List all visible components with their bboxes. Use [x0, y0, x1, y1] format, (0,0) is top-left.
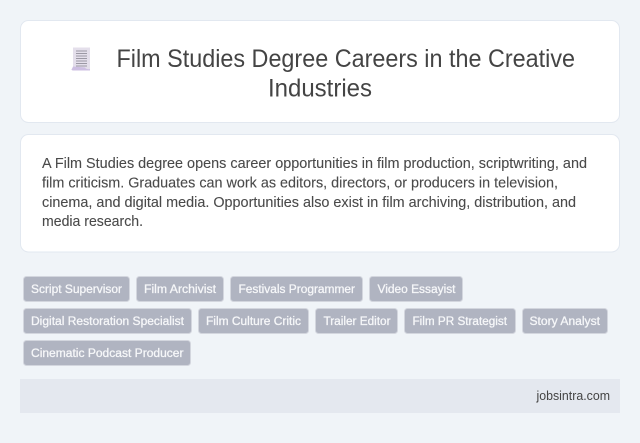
tag: Video Essayist: [370, 276, 462, 302]
tag: Story Analyst: [522, 308, 608, 334]
tag: Digital Restoration Specialist: [24, 308, 192, 334]
title: Industries: [268, 74, 372, 102]
tag: Festivals Programmer: Festivals Programmer: [238, 282, 355, 296]
tag: Cinematic Podcast Producer: Cinematic Podcast Producer: [31, 346, 184, 360]
title: [116, 45, 575, 102]
tag: Trailer Editor: [316, 308, 398, 334]
tag: Festivals Programmer: [230, 276, 362, 302]
tag: Film PR Strategist: Film PR Strategist: [412, 314, 508, 328]
footer bar: jobsintra.com: [536, 389, 610, 403]
tag: Script Supervisor: [24, 276, 130, 302]
icon: paper scroll document: [72, 48, 90, 70]
career tags: [24, 276, 608, 366]
panel: description: film criticism. Graduates can work as editors, directors, or producers in television,: [42, 176, 558, 192]
tag: Film Culture Critic: [198, 308, 308, 334]
panel: description: media research.: [42, 214, 143, 230]
title: Film Studies Degree Careers in the Creative: [116, 45, 575, 73]
tag: Video Essayist: Video Essayist: [378, 282, 456, 296]
tag: Cinematic Podcast Producer: [24, 340, 190, 366]
tag: Film Archivist: Film Archivist: [144, 282, 217, 296]
tag: Film Archivist: [136, 276, 224, 302]
tag: Story Analyst: Story Analyst: [530, 314, 601, 328]
tag: Film PR Strategist: [404, 308, 516, 334]
tag: Film Culture Critic: Film Culture Critic: [206, 314, 301, 328]
panel: title card: [20, 20, 620, 122]
tag: Script Supervisor: Script Supervisor: [31, 282, 122, 296]
panel: description: cinema, and digital media. Opportunities also exist in film archiving, distribution, and: [42, 195, 576, 211]
footer bar: [20, 379, 620, 413]
panel: description: [20, 134, 620, 252]
panel: description: A Film Studies degree opens career opportunities in film production, scriptwriting, and: [42, 156, 587, 172]
tag: Trailer Editor: Trailer Editor: [324, 314, 390, 328]
tag: Digital Restoration Specialist: Digital Restoration Specialist: [31, 314, 185, 328]
